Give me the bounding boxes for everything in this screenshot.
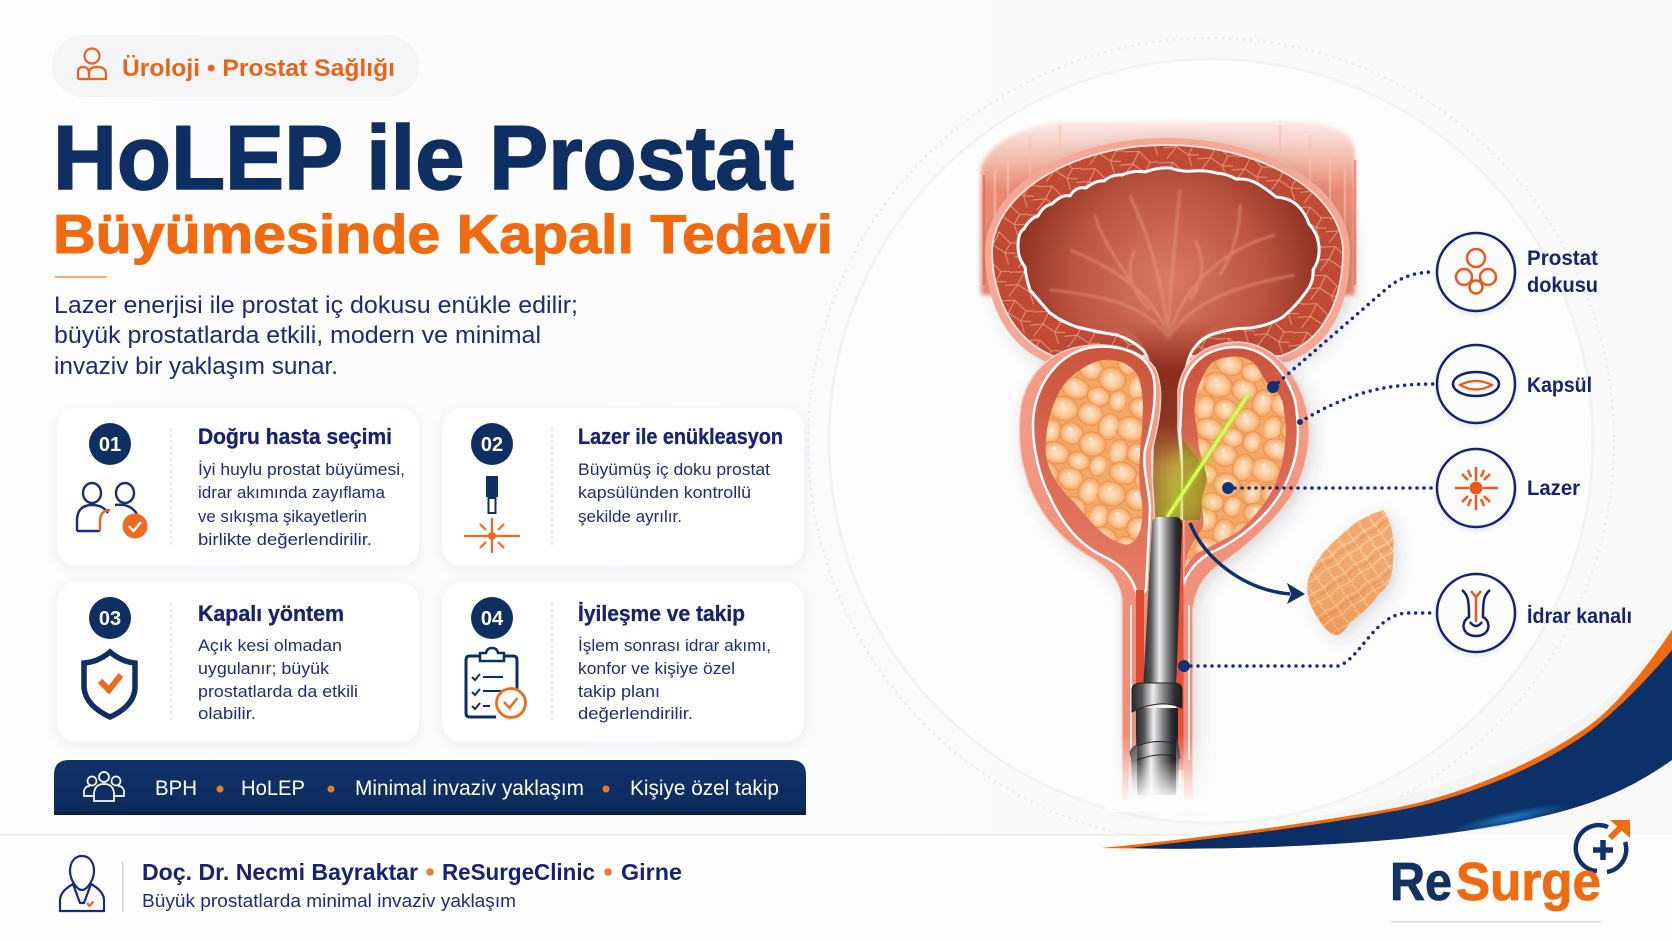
badge 01: 01 xyxy=(99,434,121,456)
badge 02: 02 xyxy=(481,434,503,456)
footer: doctor xyxy=(60,856,682,912)
bladder cavity xyxy=(1018,168,1319,520)
cavity veins xyxy=(1050,190,1295,340)
intro paragraph: invaziv bir yaklaşım sunar. xyxy=(54,353,338,380)
card 04 title: İyileşme ve takip xyxy=(578,601,745,626)
title xyxy=(53,108,833,265)
intro paragraph: Lazer enerjisi ile prostat iç dokusu enükle edilir; xyxy=(54,292,578,319)
urethra bottom fade xyxy=(1105,735,1216,812)
badge 01 xyxy=(89,423,131,465)
prostate gland left lobe xyxy=(1046,360,1143,544)
card 03 title: Kapalı yöntem xyxy=(198,601,344,626)
card 01 text: birlikte değerlendirilir. xyxy=(198,530,372,549)
endoscope xyxy=(1130,517,1182,795)
logo: ReSurge xyxy=(1390,820,1630,922)
swoosh xyxy=(1101,620,1672,849)
keyword texts: HoLEP xyxy=(241,777,305,800)
icon: group xyxy=(84,772,124,801)
card 04 text: değerlendirilir. xyxy=(578,704,693,723)
card 02 text xyxy=(578,460,770,526)
callout: Lazer xyxy=(1437,449,1580,527)
callout: Kapsül: Kapsül xyxy=(1527,374,1592,397)
icon: laser fibre xyxy=(464,476,520,553)
card 01 text xyxy=(198,460,405,549)
card 03 text: olabilir. xyxy=(198,704,256,723)
badge 04: 04 xyxy=(481,608,504,630)
callout: Prostat dokusu: Prostat xyxy=(1527,247,1598,270)
card 01 text: idrar akımında zayıflama xyxy=(198,483,386,502)
capsule inner right xyxy=(1180,347,1298,585)
card 01 title: Doğru hasta seçimi xyxy=(198,424,392,449)
capsule inner left xyxy=(1033,347,1155,600)
badge 02 xyxy=(471,423,513,465)
icon: capsule xyxy=(1453,372,1499,396)
intro paragraph xyxy=(54,292,578,380)
badge 03: 03 xyxy=(99,608,121,630)
icon: urology person xyxy=(78,48,106,79)
logo symbol xyxy=(1576,820,1630,872)
laser glow xyxy=(1164,447,1208,523)
doctor name xyxy=(142,859,682,885)
card 03 text: prostatlarda da etkili xyxy=(198,682,358,701)
pill text: Üroloji • Prostat Sağlığı xyxy=(122,55,395,82)
olive strip beside urethra xyxy=(1183,440,1207,520)
badge 03 xyxy=(89,597,131,639)
laser beam xyxy=(1167,395,1248,517)
card 03 text: uygulanır; büyük xyxy=(198,659,330,678)
callout: İdrar kanalı: İdrar kanalı xyxy=(1527,605,1632,628)
card 04 text: İşlem sonrası idrar akımı, xyxy=(578,636,771,655)
keyword texts: Kişiye özel takip xyxy=(630,777,779,800)
keyword bar xyxy=(54,760,806,815)
prostate gland right lobe xyxy=(1185,356,1286,568)
doctor name: Doç. Dr. Necmi Bayraktar xyxy=(142,859,418,885)
card 02 text: Büyümüş iç doku prostat xyxy=(578,460,770,479)
card 02 xyxy=(442,408,804,566)
intro paragraph: büyük prostatlarda etkili, modern ve minimal xyxy=(54,322,541,349)
icon: patients with check xyxy=(77,483,148,538)
keyword texts xyxy=(155,777,779,800)
icon: laser burst xyxy=(1455,467,1498,510)
logo: ReSurge: Surge xyxy=(1456,852,1601,912)
callout: Prostat dokusu xyxy=(1437,233,1598,311)
category pill xyxy=(52,35,419,97)
card 02 text: şekilde ayrılır. xyxy=(578,507,682,526)
card 03 xyxy=(57,582,419,742)
card 04 text xyxy=(578,636,771,723)
card 04 text: konfor ve kişiye özel xyxy=(578,659,735,678)
icon: shield xyxy=(84,652,135,717)
leader lines xyxy=(1184,272,1436,666)
callout: Lazer: Lazer xyxy=(1527,477,1580,500)
doctor name: ReSurgeClinic xyxy=(442,859,595,885)
title: HoLEP ile Prostat xyxy=(53,108,794,209)
icon: doctor xyxy=(60,856,104,911)
bladder muscle fade xyxy=(981,122,1355,295)
callout: Kapsül xyxy=(1437,345,1592,423)
card 04 text: takip planı xyxy=(578,682,660,701)
card 01 xyxy=(57,408,419,566)
card 04 xyxy=(442,582,804,742)
arrow to removed tissue xyxy=(1190,523,1305,604)
doctor name: Girne xyxy=(621,859,682,885)
bladder wall xyxy=(985,138,1350,362)
icon: clipboard xyxy=(466,648,526,718)
icon: urethra xyxy=(1462,590,1490,636)
card 01 text: ve sıkışma şikayetlerin xyxy=(198,507,367,526)
removed tissue xyxy=(1307,510,1394,635)
keyword texts: Minimal invaziv yaklaşım xyxy=(355,777,584,800)
icon: tissue cells xyxy=(1456,249,1496,294)
card 02 title: Lazer ile enükleasyon xyxy=(578,424,783,449)
card 01 text: İyi huylu prostat büyümesi, xyxy=(198,460,405,479)
logo wordmark: Re xyxy=(1390,852,1452,912)
callout: Prostat dokusu: dokusu xyxy=(1527,274,1598,297)
subtitle: Büyümesinde Kapalı Tedavi xyxy=(53,203,833,265)
footer subtitle: Büyük prostatlarda minimal invaziv yaklaşım xyxy=(142,890,516,911)
card 03 text: Açık kesi olmadan xyxy=(198,636,342,655)
card 02 text: kapsülünden kontrollü xyxy=(578,483,751,502)
callout: İdrar kanalı xyxy=(1437,574,1632,652)
anatomy illustration: bladder and prostate xyxy=(981,122,1394,812)
prostate capsule shells xyxy=(1019,342,1309,800)
badge 04 xyxy=(471,597,513,639)
card 03 text xyxy=(198,636,358,723)
keyword texts: BPH xyxy=(155,777,197,800)
